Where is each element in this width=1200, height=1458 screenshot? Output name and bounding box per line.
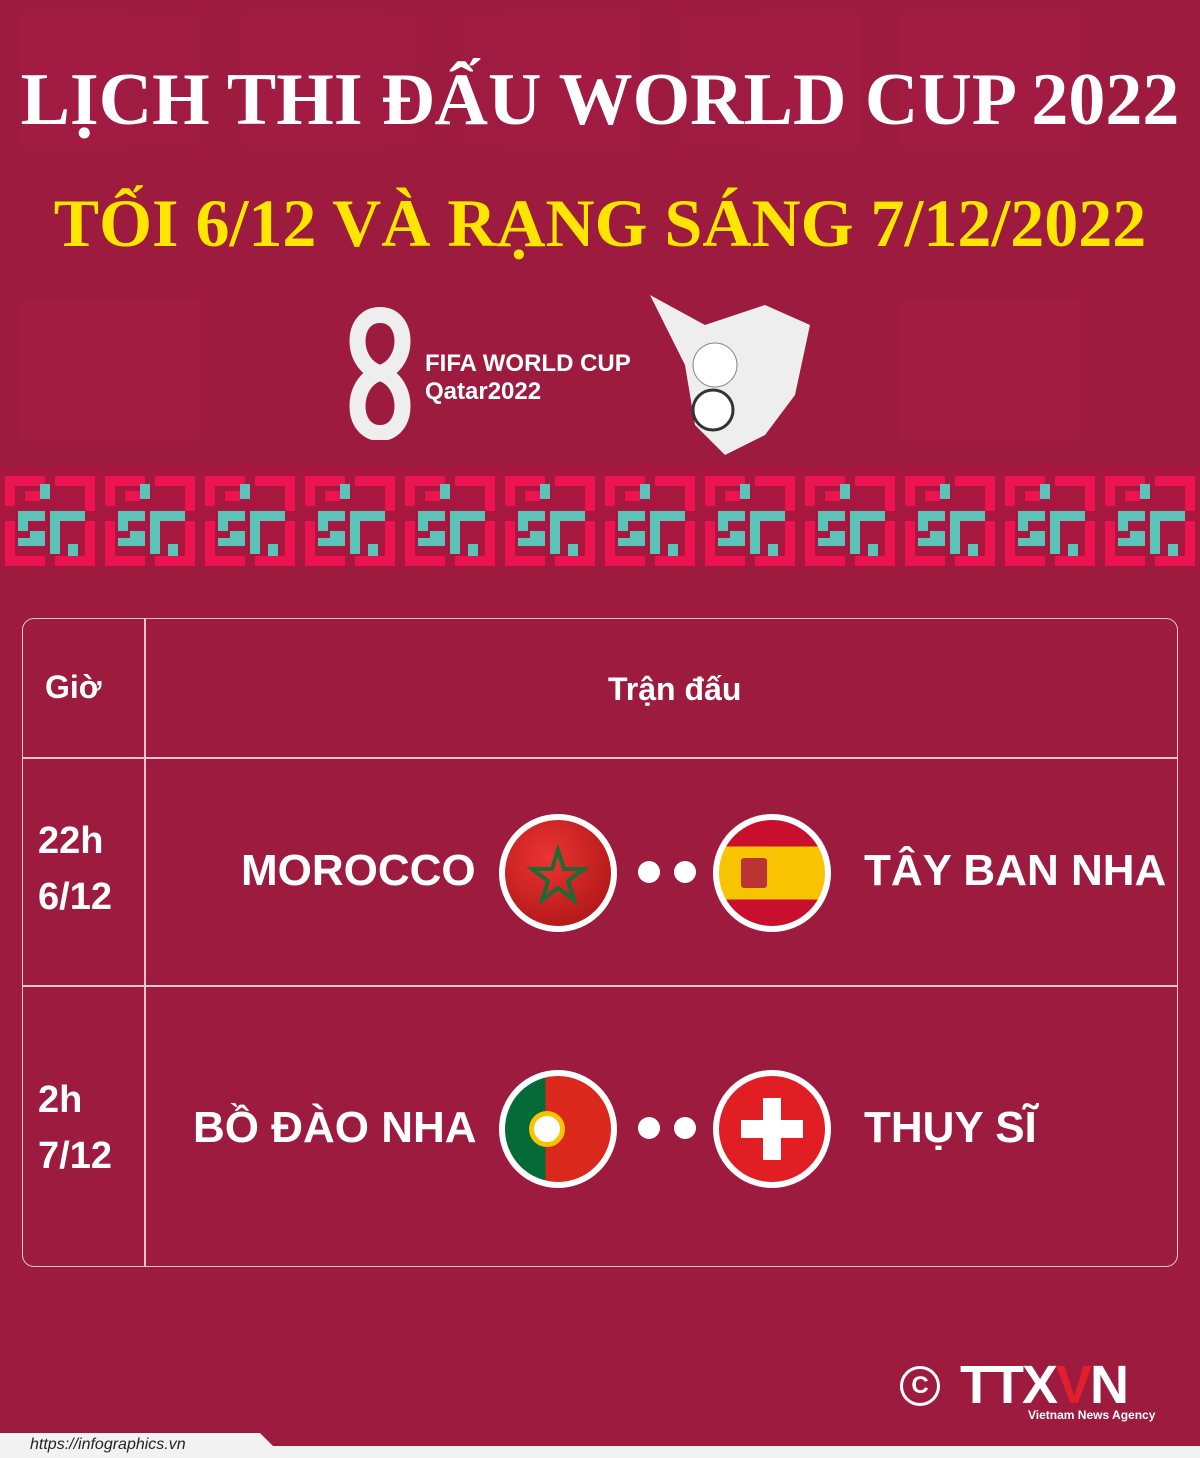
- bottom strip: [0, 1446, 1200, 1458]
- flag: Portugal: [499, 1070, 617, 1188]
- header: Giờ: Giờ: [45, 669, 102, 705]
- decorative band: [0, 466, 1200, 566]
- row 1 team: Morocco: MOROCCO: [241, 846, 476, 895]
- title: LỊCH THI ĐẤU WORLD CUP 2022: [21, 59, 1179, 141]
- flag: Morocco: [499, 814, 617, 932]
- subtitle: TỐI 6/12 VÀ RẠNG SÁNG 7/12/2022: [54, 185, 1146, 261]
- row 1 time: 6/12: [38, 876, 112, 918]
- logo: FIFA World Cup Qatar 2022: FIFA WORLD CUP: [425, 350, 631, 377]
- logo: TTXVN: Vietnam News Agency: [1028, 1408, 1155, 1422]
- row 2 time: 7/12: [38, 1135, 112, 1177]
- flag: Switzerland: [713, 1070, 831, 1188]
- row 2 team: Bồ Đào Nha: BỒ ĐÀO NHA: [193, 1103, 477, 1152]
- header: Trận đấu: Trận đấu: [608, 671, 741, 707]
- vs dots: [638, 861, 696, 883]
- vs dots: [638, 1117, 696, 1139]
- row 2 team: Thụy Sĩ: THỤY SĨ: [864, 1103, 1037, 1152]
- row 2 time: [38, 1079, 112, 1177]
- row 2 time: 2h: [38, 1079, 82, 1121]
- row 1 time: 22h: [38, 820, 103, 862]
- mascot: [650, 295, 810, 455]
- row 1 team: Tây Ban Nha: TÂY BAN NHA: [864, 846, 1166, 895]
- logo: TTXVN: TTXVN: [960, 1355, 1127, 1415]
- logo: FIFA World Cup Qatar 2022: [350, 307, 631, 440]
- row 1 time: [38, 820, 112, 918]
- logo: TTXVN: C: [911, 1372, 929, 1399]
- url tab: https://infographics.vn: [30, 1436, 186, 1453]
- logo: TTXVN: [900, 1355, 1156, 1422]
- flag: Spain: [713, 814, 831, 932]
- url tab: [0, 1433, 273, 1452]
- table: [22, 618, 1178, 1267]
- background pattern: [0, 0, 1200, 460]
- logo: FIFA World Cup Qatar 2022: Qatar2022: [425, 378, 541, 405]
